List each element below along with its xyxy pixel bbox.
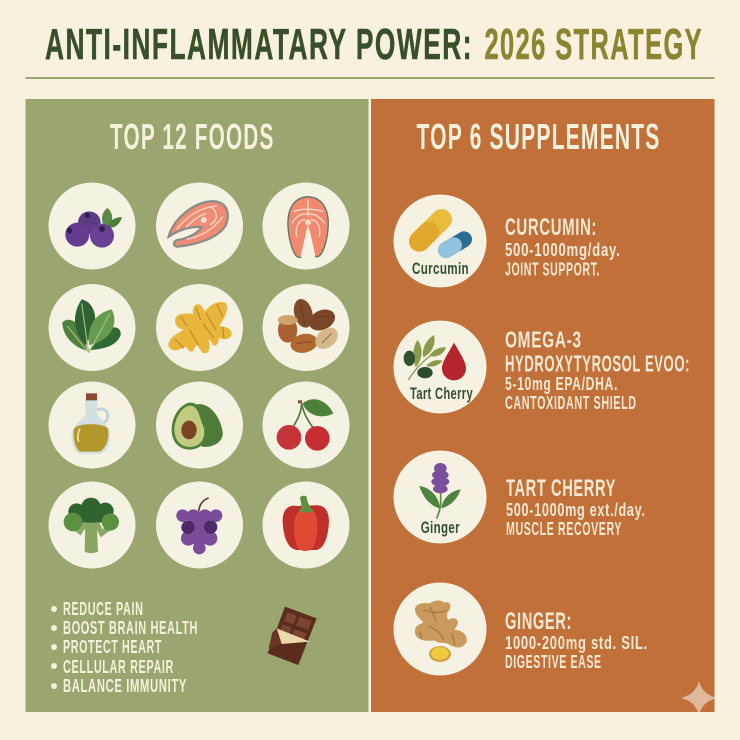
icon: broccoli xyxy=(48,482,136,568)
text: curcumin: JOINT SUPPORT. xyxy=(505,260,600,280)
bullet list: BOOST BRAIN HEALTH xyxy=(63,618,198,638)
title: ANTI-INFLAMMATARY POWER: xyxy=(45,20,473,69)
text: tart cherry: MUSCLE RECOVERY xyxy=(506,519,622,539)
icon: chocolate bar xyxy=(268,607,317,665)
icon: lavender sprig xyxy=(394,450,486,544)
icon: turmeric root xyxy=(156,284,243,371)
bullet list: PROTECT HEART xyxy=(63,637,162,657)
icon: olive branch and drop: Tart Cherry xyxy=(410,384,473,403)
icon: cherries xyxy=(262,382,350,468)
icon: blueberries xyxy=(48,182,136,270)
text: curcumin xyxy=(505,214,620,280)
supplement: ginger xyxy=(394,582,648,676)
text: ginger: GINGER: xyxy=(505,608,572,635)
icon: red pepper xyxy=(262,482,350,568)
icon: capsules xyxy=(394,194,486,288)
bullet list xyxy=(51,599,198,696)
icon: salmon cross-section xyxy=(262,182,350,270)
panel: top 6 supplements xyxy=(371,99,714,712)
text: ginger xyxy=(505,608,648,672)
text: tart cherry xyxy=(506,475,646,539)
icon: avocado xyxy=(156,382,243,468)
text: omega-3 xyxy=(505,327,690,413)
text: ginger: 1000-200mg std. SIL. xyxy=(505,633,648,653)
text: omega-3: 5-10mg EPA/DHA. xyxy=(505,374,618,394)
supplement: tart cherry xyxy=(394,450,646,544)
supplement: omega-3 xyxy=(394,320,690,414)
icon: olive branch and drop xyxy=(394,320,486,414)
text: tart cherry: TART CHERRY xyxy=(506,475,616,502)
supplement: curcumin xyxy=(394,194,620,288)
icon: lavender sprig: Ginger xyxy=(421,518,460,537)
text: ginger: DIGESTIVE EASE xyxy=(505,652,602,672)
icon: nuts xyxy=(262,284,350,371)
bullet list: REDUCE PAIN xyxy=(63,599,144,619)
text: omega-3: OMEGA-3 xyxy=(505,327,582,353)
bullet list: BALANCE IMMUNITY xyxy=(63,676,187,696)
icon: grapes xyxy=(156,482,243,568)
icon: capsules: Curcumin xyxy=(412,259,469,278)
icon: spinach xyxy=(48,284,136,371)
icon: salmon steak xyxy=(156,182,243,270)
text: curcumin: CURCUMIN: xyxy=(505,214,597,241)
text: omega-3: CANTOXIDANT SHIELD xyxy=(505,393,637,413)
text: tart cherry: 500-1000mg ext./day. xyxy=(506,500,646,520)
panel: top 12 foods xyxy=(26,99,368,712)
text: curcumin: 500-1000mg/day. xyxy=(505,240,620,260)
bullet list: CELLULAR REPAIR xyxy=(63,657,174,677)
icon: ginger root xyxy=(394,582,486,676)
icon: sparkle xyxy=(681,681,717,715)
heading: top 12 foods: TOP 12 FOODS xyxy=(110,116,274,157)
icon: olive oil bottle xyxy=(48,382,136,468)
